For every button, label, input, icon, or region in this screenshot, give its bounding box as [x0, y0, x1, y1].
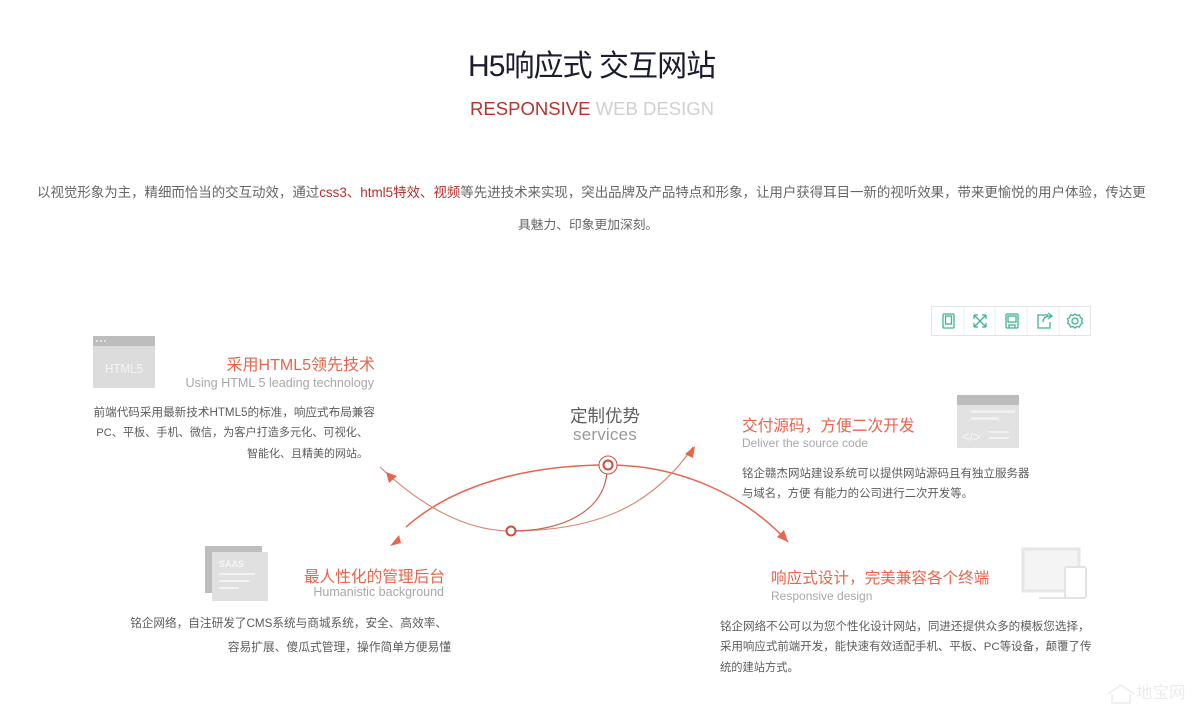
panel: admin: 容易扩展、傻瓜式管理，操作简单方便易懂	[228, 641, 451, 654]
subheading: Deliver the source code	[742, 436, 868, 450]
icon: code window	[957, 395, 1019, 448]
intro paragraph	[37, 185, 1146, 232]
panel: HTML5: 智能化、且精美的网站。	[247, 448, 368, 460]
node: main ring	[599, 456, 617, 474]
body text: 铭企网络，自注研发了CMS系统与商城系统，安全、高效率、	[130, 617, 447, 630]
subheading: Humanistic background	[313, 585, 444, 599]
panel: responsive design: 统的建站方式。	[720, 662, 799, 674]
panel: admin	[130, 546, 451, 654]
arrowhead: upper right	[685, 446, 695, 458]
panel: source code	[742, 395, 1030, 500]
heading: 响应式设计，完美兼容各个终端	[771, 570, 989, 587]
toolbar icons	[931, 306, 1091, 336]
body text: 铭企赣杰网站建设系统可以提供网站源码且有独立服务器	[742, 468, 1030, 480]
heading: 交付源码，方便二次开发	[742, 418, 915, 435]
heading: 采用HTML5领先技术	[227, 357, 375, 374]
arrowhead: lower left	[390, 535, 401, 546]
center heading: services: 定制优势	[570, 406, 640, 426]
center heading: services	[570, 406, 640, 444]
panel: responsive design: 采用响应式前端开发，能快速有效适配手机、平板、PC等设备，颠覆了传	[720, 641, 1091, 653]
icon: monitor and phone	[1022, 548, 1087, 599]
panel: HTML5: PC、平板、手机、微信，为客户打造多元化、可视化、	[96, 427, 368, 439]
intro paragraph: 具魅力、印象更加深刻。	[518, 217, 658, 232]
panel: HTML5	[93, 336, 375, 460]
arrowhead: upper left	[386, 472, 397, 483]
center heading: services: services	[573, 425, 637, 444]
icon: HTML5 window	[93, 336, 155, 388]
subheading: Using HTML 5 leading technology	[185, 376, 374, 390]
body text: 前端代码采用最新技术HTML5的标准，响应式布局兼容	[94, 406, 375, 419]
icon: SAAS cards	[205, 546, 268, 601]
subtitle: RESPONSIVE WEB DESIGN	[470, 98, 714, 119]
watermark: 地宝网	[1136, 684, 1186, 702]
intro paragraph: 以视觉形象为主，精细而恰当的交互动效，通过css3、html5特效、视频等先进技术来实现，突出品牌及产品特点和形象，让用户获得耳目一新的视听效果，带来更愉悦的用户体验，传达更	[37, 185, 1146, 200]
arrowhead: lower right	[777, 530, 788, 542]
panel: source code: 与域名，方便 有能力的公司进行二次开发等。	[742, 488, 973, 500]
body text: 铭企网络不公可以为您个性化设计网站，同进还提供众多的模板您选择，	[720, 621, 1090, 633]
icon: SAAS cards: SAAS	[219, 559, 244, 569]
panel: responsive design	[720, 548, 1091, 674]
subheading: Responsive design	[771, 589, 872, 603]
watermark	[1108, 684, 1186, 704]
icon: code window: </>	[962, 429, 981, 444]
node: lower ring	[506, 526, 516, 536]
heading: 最人性化的管理后台	[304, 569, 445, 586]
title: H5响应式 交互网站	[468, 50, 715, 83]
icon: HTML5 window: HTML5	[105, 361, 143, 376]
